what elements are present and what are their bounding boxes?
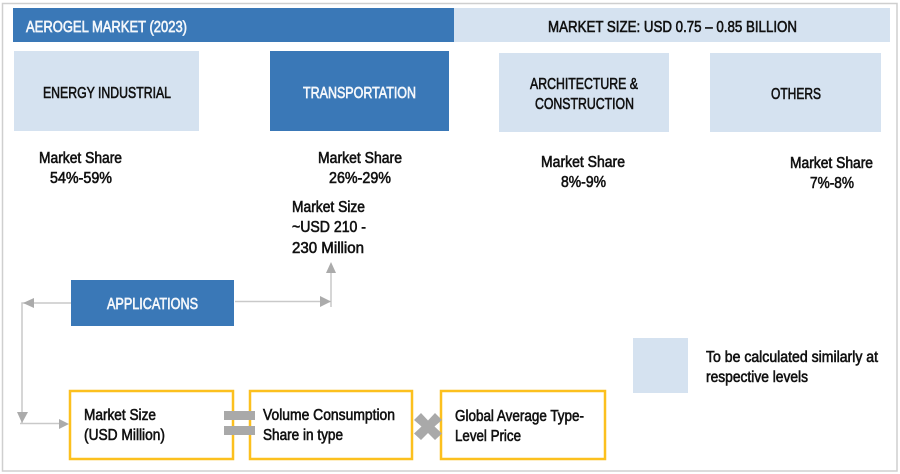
text: energy industrial market share: 54%-59%	[50, 170, 112, 187]
panel: applications	[71, 280, 234, 326]
text: architecture market share: 8%-9%	[561, 174, 606, 191]
text: transportation market share	[318, 150, 402, 187]
box: market size: (USD Million)	[84, 427, 165, 444]
text: others market share	[790, 155, 873, 192]
box: global average price: Level Price	[455, 428, 521, 445]
text: transportation market share: Market Share	[318, 150, 402, 167]
box: market size	[70, 391, 233, 459]
text: others market share: Market Share	[790, 155, 873, 172]
text: transportation market share: 26%-29%	[329, 170, 391, 187]
box: market size: Market Size	[84, 407, 156, 424]
text: transportation market size	[292, 199, 366, 257]
panel: others: OTHERS	[771, 86, 821, 103]
text: others market share: 7%-8%	[810, 175, 854, 192]
box: volume consumption share: Share in type	[263, 427, 343, 444]
panel: transportation	[270, 51, 449, 131]
text: transportation market size: 230 Million	[292, 240, 364, 257]
panel: energy industrial: ENERGY INDUSTRIAL	[43, 85, 171, 102]
header: title bar	[13, 8, 454, 42]
header: title bar: AEROGEL MARKET (2023)	[26, 19, 187, 36]
panel: energy industrial	[14, 51, 199, 131]
panel: applications: APPLICATIONS	[107, 296, 198, 313]
arrow: applications to transportation	[235, 262, 336, 307]
box: volume consumption share	[250, 391, 412, 459]
box: global average price: Global Average Type-	[455, 408, 584, 425]
text: architecture market share	[541, 154, 625, 191]
panel: others	[710, 53, 881, 132]
panel: transportation: TRANSPORTATION	[303, 85, 416, 102]
legend	[633, 338, 879, 393]
icon: multiply sign	[414, 413, 442, 440]
panel: architecture and construction: CONSTRUCTION	[535, 96, 634, 113]
text: architecture market share: Market Share	[541, 154, 625, 171]
legend: respective levels	[706, 369, 808, 386]
box: volume consumption share: Volume Consumption	[263, 407, 395, 424]
arrow: applications to market size	[17, 298, 71, 429]
header: market size bar	[454, 8, 890, 42]
text: energy industrial market share: Market Share	[39, 150, 122, 167]
panel: architecture and construction	[499, 53, 669, 132]
panel: architecture and construction: ARCHITECTURE &	[530, 76, 639, 93]
legend: To be calculated similarly at	[706, 349, 879, 366]
text: energy industrial market share	[39, 150, 122, 187]
text: transportation market size: ~USD 210 -	[292, 219, 366, 236]
box: global average price	[441, 391, 605, 459]
text: transportation market size: Market Size	[292, 199, 365, 216]
header: market size bar: MARKET SIZE: USD 0.75 – 0.85 BILLION	[548, 19, 797, 36]
icon: equals sign	[224, 411, 255, 435]
